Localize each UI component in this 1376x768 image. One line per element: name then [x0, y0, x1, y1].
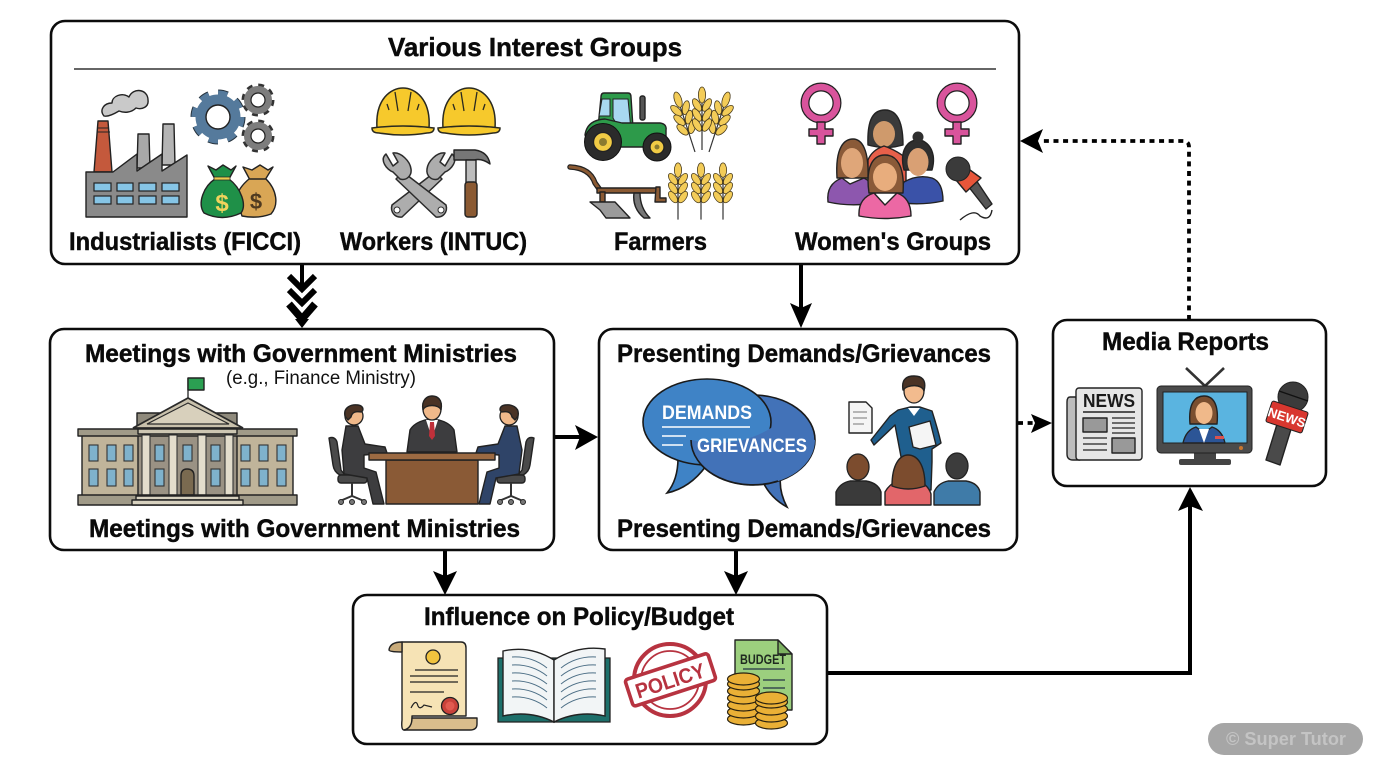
- panel: influence on policy and budget: [353, 595, 827, 744]
- icon: factory: [86, 91, 187, 217]
- icon: newspaper: NEWS: [1083, 391, 1135, 411]
- icon: budget document with coins: BUDGET: [740, 652, 787, 667]
- icon: wheat row bottom: [667, 163, 734, 220]
- heading: media reports: Media Reports: [1102, 328, 1269, 356]
- icon: wheat bundle top: [665, 87, 739, 156]
- icon: speech bubbles: [643, 379, 815, 507]
- icon: policy stamp: [625, 644, 716, 716]
- icon: newspaper: [1067, 388, 1142, 460]
- icon: money bags: [201, 165, 276, 218]
- arrow: media reports dotted back to interest groups: [1020, 129, 1189, 320]
- caption: meetings: Meetings with Government Ministries: [89, 515, 520, 543]
- panel: meetings with government ministries: [50, 329, 554, 550]
- heading: presenting demands: Presenting Demands/Grievances: [617, 340, 991, 368]
- icon: group of women: [828, 110, 943, 218]
- icon: tractor: [584, 93, 671, 161]
- icon: hard hats: [372, 88, 500, 135]
- icon: money bags: $: [215, 190, 229, 217]
- label: farmers: Farmers: [614, 228, 707, 256]
- icon: news microphone: [1266, 382, 1308, 465]
- icon: money bags: $: [250, 189, 262, 214]
- icon: open book: [498, 648, 610, 722]
- icon: gears: [194, 86, 272, 150]
- label: industrialists: Industrialists (FICCI): [69, 228, 301, 256]
- icon: hammer: [454, 150, 490, 217]
- arrow: interest groups triple chevron to meetings: [289, 264, 315, 328]
- icon: government building: [78, 378, 297, 505]
- panel: media reports: [1053, 320, 1326, 486]
- arrow: presenting demands to influence: [724, 550, 748, 595]
- heading: meetings: Meetings with Government Ministries: [85, 340, 517, 368]
- icon: microphone: [946, 157, 992, 220]
- panel: presenting demands and grievances: [599, 329, 1017, 550]
- arrow: meetings to influence: [433, 550, 457, 595]
- icon: speech bubbles: GRIEVANCES: [697, 436, 807, 457]
- figure: right man with chair: [476, 405, 534, 504]
- icon: speech bubbles: DEMANDS: [662, 403, 752, 424]
- icon: plough: [570, 167, 666, 218]
- heading: various interest groups: Various Interest Groups: [388, 32, 682, 62]
- icon: news microphone: NEWS: [1266, 404, 1308, 431]
- figure: left man with chair: [329, 405, 387, 504]
- panel: various interest groups: [51, 21, 1019, 264]
- icon: certificate scroll: [389, 642, 477, 730]
- watermark: [1208, 723, 1363, 755]
- icon: television: [1157, 368, 1252, 465]
- heading: influence: Influence on Policy/Budget: [424, 603, 735, 631]
- arrow: presenting demands dotted to media reports: [1018, 414, 1052, 433]
- icon: officials meeting at table: [329, 396, 534, 504]
- subheading: example ministry: (e.g., Finance Ministry): [226, 368, 416, 389]
- icon: policy stamp: POLICY: [633, 659, 708, 703]
- arrow: meetings to presenting demands: [554, 425, 598, 450]
- arrow: influence to media reports: [827, 487, 1203, 673]
- icon: presenter with audience: [836, 376, 980, 505]
- watermark: © Super Tutor: [1226, 729, 1346, 749]
- caption: presenting demands: Presenting Demands/Grievances: [617, 515, 991, 543]
- arrow: interest groups to presenting demands: [790, 264, 812, 328]
- icon: crossed wrenches: [383, 153, 455, 217]
- figure: centre man: [407, 396, 457, 452]
- icon: budget document with coins: [728, 640, 792, 729]
- label: workers: Workers (INTUC): [340, 228, 527, 256]
- label: women's groups: Women's Groups: [795, 228, 991, 256]
- figure: table: [369, 453, 495, 504]
- icon: female symbols: [805, 87, 973, 144]
